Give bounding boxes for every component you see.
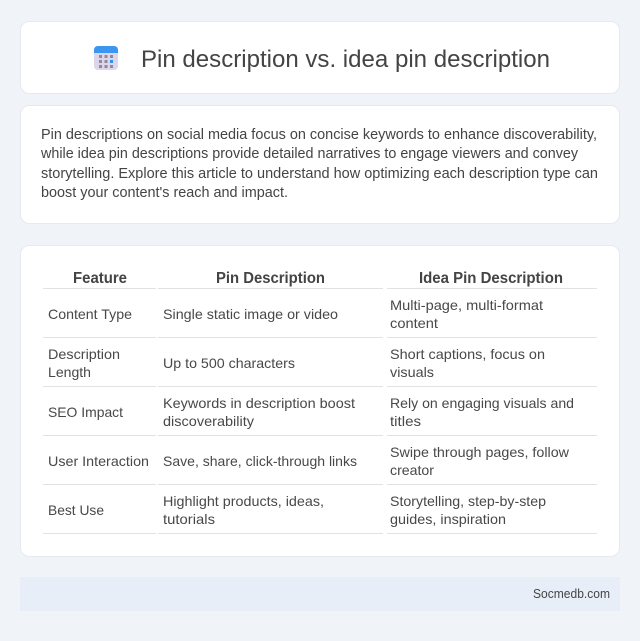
panel: comparison table bbox=[20, 246, 620, 556]
row: content type: Single static image or video bbox=[163, 306, 338, 322]
table header: Feature bbox=[73, 270, 127, 287]
row: SEO impact: discoverability bbox=[163, 413, 254, 429]
intro paragraph: Pin descriptions on social media focus on concise keywords to enhance discoverability, bbox=[41, 127, 597, 143]
table header: Idea Pin Description bbox=[419, 270, 563, 287]
row: SEO impact bbox=[48, 395, 574, 429]
footer source text: Socmedb.com bbox=[533, 587, 610, 601]
intro paragraph: storytelling. Explore this article to understand how optimizing each description type can bbox=[41, 166, 598, 182]
row: SEO impact: Rely on engaging visuals and bbox=[390, 395, 574, 411]
row: user interaction: Save, share, click-through links bbox=[163, 453, 357, 469]
intro paragraph: while idea pin descriptions provide detailed narratives to engage viewers and convey bbox=[40, 146, 579, 162]
row: description length: Length bbox=[48, 364, 91, 380]
footer bbox=[20, 577, 620, 611]
row: user interaction: User Interaction bbox=[48, 453, 149, 469]
row: SEO impact: Keywords in description boost bbox=[163, 395, 355, 411]
row: description length: Short captions, focus on bbox=[390, 346, 545, 362]
row: best use: Storytelling, step-by-step bbox=[390, 493, 546, 509]
intro paragraph bbox=[40, 127, 598, 201]
row: user interaction: creator bbox=[390, 462, 434, 478]
row: description length: Up to 500 characters bbox=[163, 355, 295, 371]
heading: Pin description vs. idea pin description bbox=[141, 46, 550, 73]
row: content type: Content Type bbox=[48, 306, 132, 322]
row: description length: visuals bbox=[390, 364, 434, 380]
table rules bbox=[43, 288, 597, 534]
panel: intro text bbox=[20, 106, 620, 224]
icon: calendar bbox=[94, 46, 118, 70]
table header bbox=[73, 270, 563, 287]
intro paragraph: boost your content's reach and impact. bbox=[41, 185, 288, 201]
row: SEO impact: titles bbox=[390, 413, 421, 429]
row: user interaction: Swipe through pages, follow bbox=[390, 444, 570, 460]
row: best use: tutorials bbox=[163, 511, 215, 527]
row: best use bbox=[48, 493, 546, 527]
row: content type: content bbox=[390, 315, 438, 331]
row: user interaction bbox=[48, 444, 570, 478]
row: best use: Highlight products, ideas, bbox=[163, 493, 324, 509]
table header: Pin Description bbox=[216, 270, 325, 287]
row: best use: guides, inspiration bbox=[390, 511, 506, 527]
panel: title bbox=[20, 22, 620, 94]
row: best use: Best Use bbox=[48, 502, 104, 518]
row: SEO impact: SEO Impact bbox=[48, 404, 123, 420]
row: content type bbox=[48, 297, 543, 331]
row: content type: Multi-page, multi-format bbox=[390, 297, 543, 313]
row: description length bbox=[48, 346, 545, 380]
row: description length: Description bbox=[48, 346, 120, 362]
